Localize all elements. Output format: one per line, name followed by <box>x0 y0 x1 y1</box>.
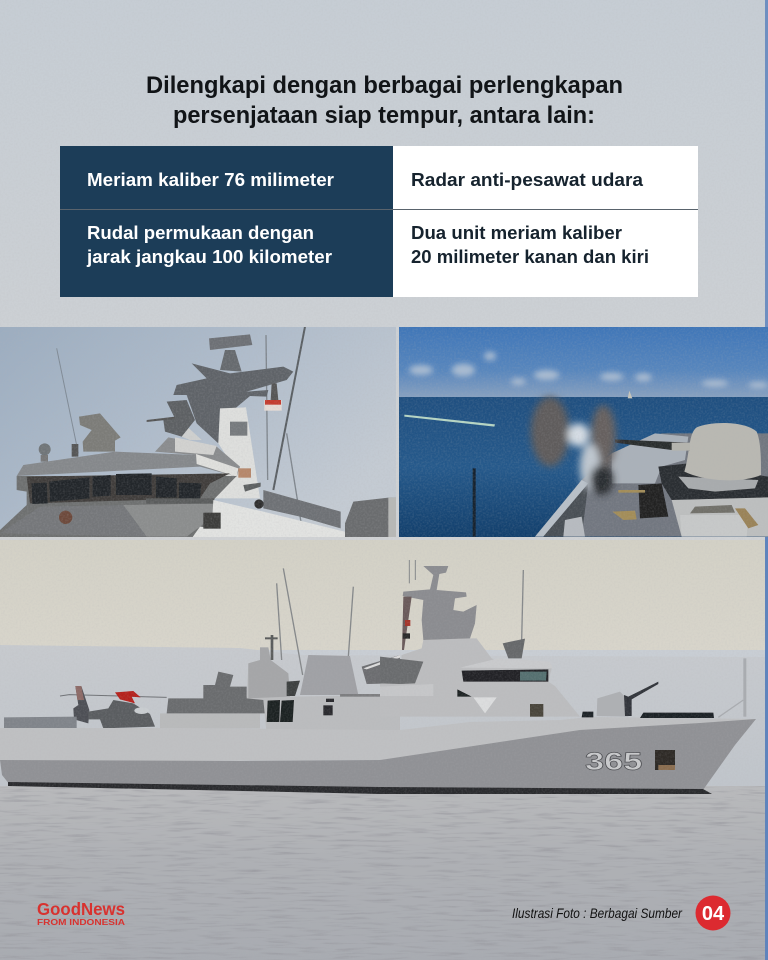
turret <box>684 423 761 480</box>
heading: Dilengkapi dengan berbagai perlengkapan <box>146 72 623 99</box>
ship aft <box>4 568 400 733</box>
page number badge: 04 <box>702 903 725 925</box>
photo: gun firing at sea <box>399 327 768 537</box>
helicopter <box>60 686 167 728</box>
photo: ship mast and bridge <box>0 327 397 538</box>
table: weapons list <box>60 146 698 297</box>
photo credit: Ilustrasi Foto : Berbagai Sumber <box>512 905 683 921</box>
logo: GoodNews: FROM INDONESIA <box>37 918 125 927</box>
table: weapons list: Radar anti-pesawat udara <box>411 170 644 190</box>
logo: GoodNews <box>37 899 125 927</box>
table: weapons list: Rudal permukaan dengan <box>87 223 314 243</box>
hull number: 365 <box>585 748 642 776</box>
logo: GoodNews: GoodNews <box>37 899 125 919</box>
heading <box>146 72 623 129</box>
hull upper <box>0 717 755 762</box>
background panel <box>0 0 768 540</box>
table: weapons list: Meriam kaliber 76 milimeter <box>87 170 334 190</box>
table: weapons list: Dua unit meriam kaliber <box>411 223 622 243</box>
photo: frigate 365 at sea <box>0 537 768 960</box>
hull lower <box>0 719 756 790</box>
page number badge <box>696 896 730 930</box>
heading: persenjataan siap tempur, antara lain: <box>173 102 595 129</box>
crew <box>582 712 714 718</box>
table: weapons list: jarak jangkau 100 kilometer <box>86 247 332 267</box>
table: weapons list: 20 milimeter kanan dan kiri <box>411 247 649 267</box>
ship forward <box>380 560 746 776</box>
smoke <box>531 397 616 495</box>
gun turret <box>597 692 628 717</box>
mast <box>403 566 477 640</box>
